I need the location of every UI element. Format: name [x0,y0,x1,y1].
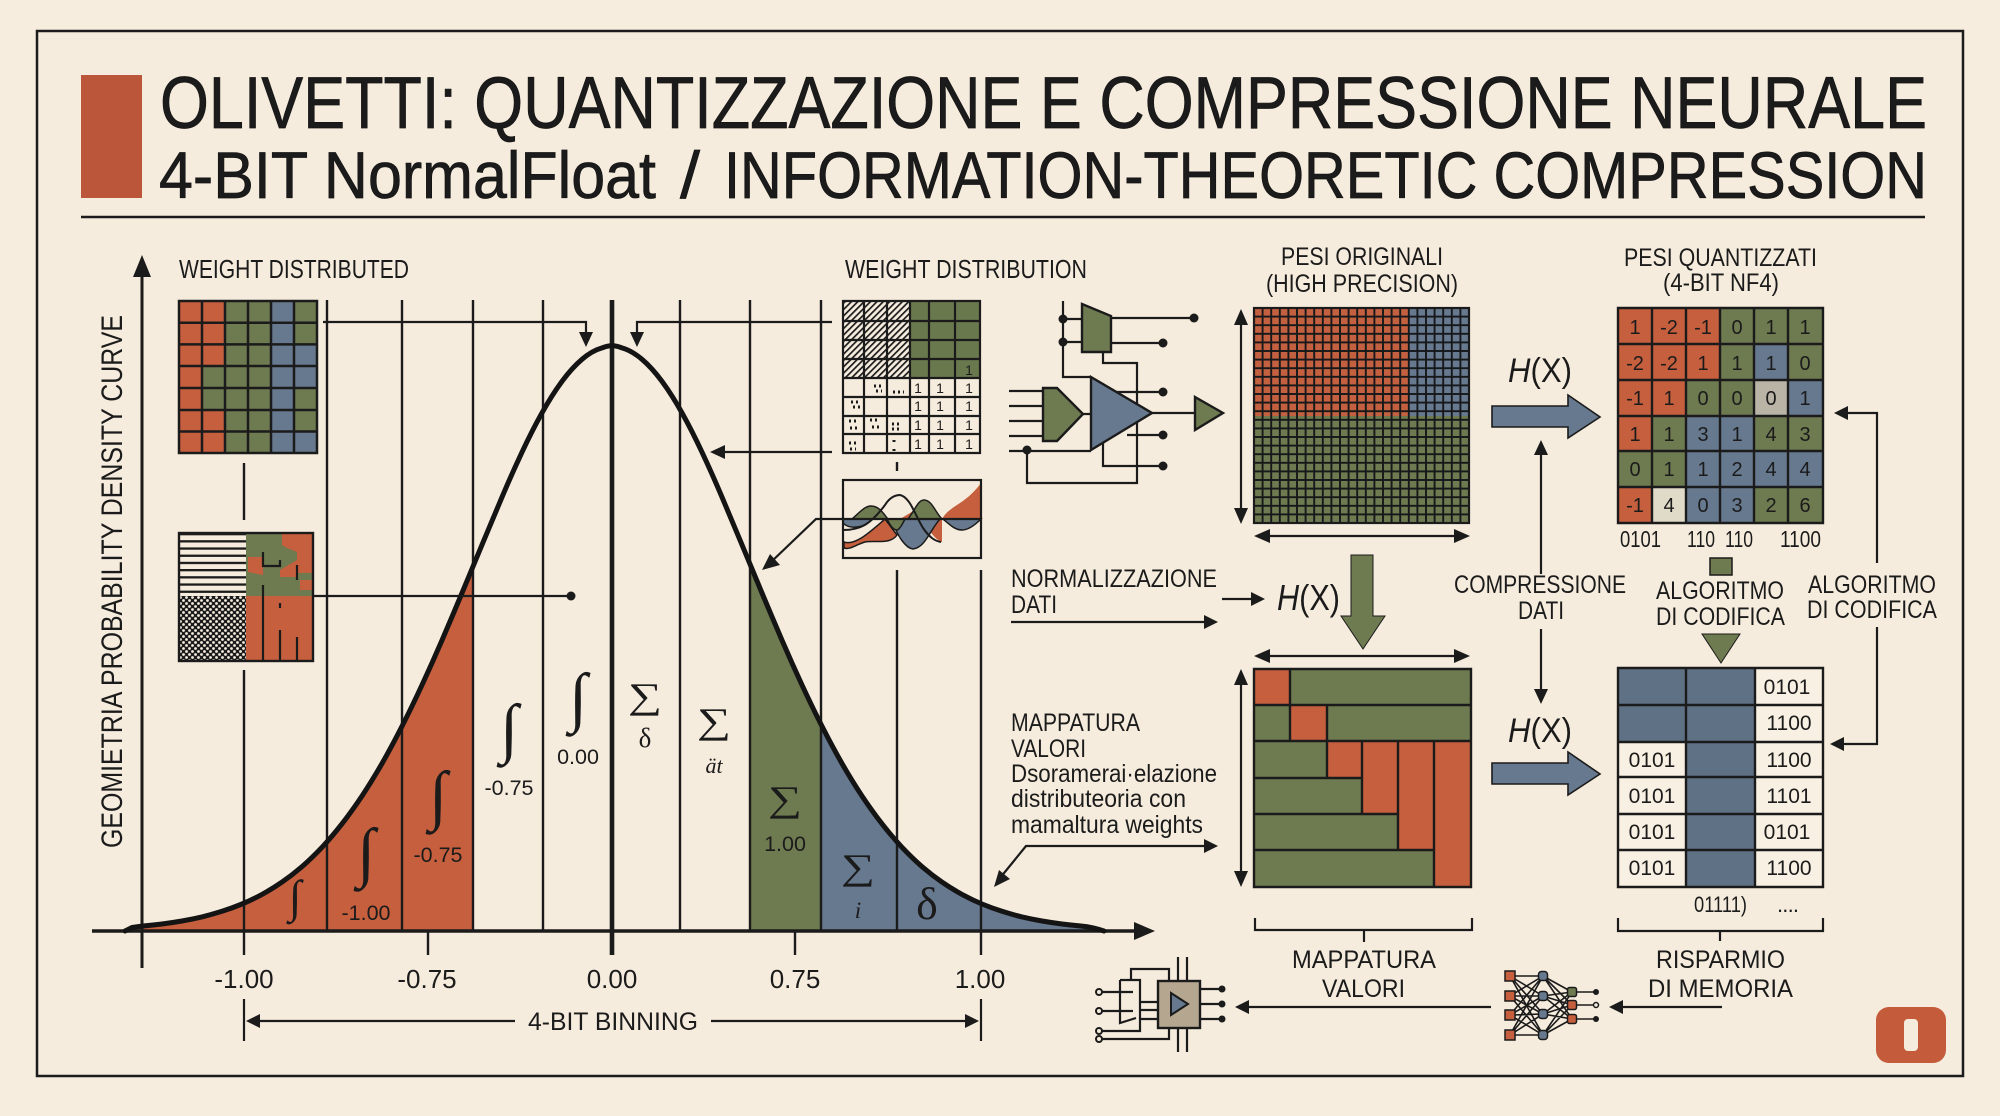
grid: quantized weights: 4 [1765,459,1777,481]
table: encoded bits [1618,668,1823,887]
icon: neural network [1505,971,1599,1040]
integral and sum annotations: 1.00 [764,832,806,856]
heading: pesi quantizzati: (4-BIT NF4) [1663,269,1779,297]
thumbnail: weight distribution table [843,301,980,453]
x axis tick labels: -1.00 [214,964,274,994]
arrow: mapped grid width [1254,649,1470,663]
text block: mappatura valori: VALORI [1011,735,1086,763]
arrow: grid width [1254,529,1470,543]
grid: quantized weights: 0 [1697,495,1709,517]
grid: quantized weights: 1 [1697,353,1709,375]
grid: quantized weights: 3 [1799,424,1811,446]
grid: quantized weights [1618,308,1823,523]
arrow: mapped grid height [1234,669,1248,887]
connector: algoritmo di codifica right: ALGORITMO [1808,571,1936,599]
encoded table footer: 01111) [1694,892,1747,917]
label: mappatura valori: MAPPATURA [1292,946,1436,974]
grid: quantized weights: -1 [1626,495,1644,517]
table: encoded bits: 0101 [1629,785,1675,808]
grid: quantized weights: -1 [1694,317,1712,339]
connector: algoritmo di codifica right [1807,406,1937,751]
integral and sum annotations: ∑ [697,701,731,741]
grid: quantized weights: 4 [1799,459,1811,481]
thumbnail: weight distribution table: 1 [914,436,922,452]
heading: pesi originali [1266,243,1458,298]
thumbnail: weight distribution table: 1 [965,398,973,414]
icon: circuit amplifier [1009,301,1223,483]
integral and sum annotations: ∫ [286,871,304,925]
arrow: weight distribution to curve peak [630,322,832,347]
heading: pesi quantizzati [1624,244,1817,297]
bracket: risparmio di memoria [1618,918,1823,941]
text block: mappatura valori: distributeoria con [1011,785,1186,813]
arrow: left to curve [710,445,832,459]
grid: quantized weights: 1 [1629,424,1641,446]
label: normalizzazione dati [1011,565,1265,629]
compressione dati with arrows [1454,440,1626,704]
bit labels under quantized grid: 110 [1687,526,1715,552]
text block: mappatura valori: Dsoramerai·elazione [1011,760,1217,788]
grid: quantized weights: 0 [1765,388,1777,410]
grid: quantized weights: 1 [1697,459,1709,481]
integral and sum annotations: ∫ [425,759,451,835]
thumbnail: weight distribution table: 1 [914,380,922,396]
integral and sum annotations: -0.75 [484,776,534,800]
arrow: wave distribution to curve [762,519,980,570]
label: risparmio di memoria [1648,946,1793,1003]
filled area: green bin [750,564,821,931]
title line 2 [159,138,1927,212]
grid: quantized weights: -2 [1626,353,1644,375]
label: risparmio di memoria: RISPARMIO [1656,946,1785,974]
integral and sum annotations: δ [916,878,938,929]
grid: mapped values [1254,669,1471,887]
heading: pesi originali: (HIGH PRECISION) [1266,270,1458,298]
label: risparmio di memoria: DI MEMORIA [1648,975,1793,1003]
thumbnail: weight distribution table: 1 [936,398,944,414]
table: encoded bits: 0101 [1764,821,1810,844]
bin grid lines [244,300,981,955]
arrow: network to chip [1235,1000,1491,1014]
4-bit binning range arrow [244,999,981,1041]
connector: algoritmo di codifica centered: DI CODIFICA [1656,603,1785,631]
grid: quantized weights: 0 [1629,459,1641,481]
x axis tick labels: 0.75 [770,964,820,994]
arrow: weight grid to curve peak [323,322,593,347]
encoded table footer [1694,892,1799,917]
thumbnail: wave distribution [843,480,981,558]
bit labels under quantized grid: 0101 [1620,526,1661,552]
arrow: pattern quadrants connector [313,592,576,600]
badge [1876,1007,1946,1063]
integral and sum annotations: ∫ [496,692,522,768]
grid: quantized weights: 1 [1663,424,1675,446]
text block: mappatura valori: MAPPATURA [1011,709,1140,737]
y axis label: GEOMIETRIA PROBABILITY DENSITY CURVE [96,315,129,848]
grid: quantized weights: 3 [1731,495,1743,517]
label: weight distributed: WEIGHT DISTRIBUTED [179,256,409,284]
x axis tick labels [214,964,1005,994]
compressione dati with arrows: DATI [1518,597,1564,625]
x axis tick labels: -0.75 [397,964,457,994]
label: weight distribution: WEIGHT DISTRIBUTION [845,256,1087,284]
connector: algoritmo di codifica centered: ALGORITMO [1656,577,1784,605]
text block: mappatura valori: mamaltura weights [1011,811,1203,839]
bit labels under quantized grid: 110 [1725,526,1753,552]
x axis [92,922,1155,940]
heading: pesi quantizzati: PESI QUANTIZZATI [1624,244,1817,272]
grid: quantized weights: 2 [1765,495,1777,517]
table: encoded bits: 0101 [1629,749,1675,772]
thumbnail: pattern quadrants [179,533,313,661]
grid: quantized weights: 0 [1697,388,1709,410]
thumbnail: weight distribution table: 1 [965,417,973,433]
thumbnail: weight distribution table: 1 [965,362,973,378]
4-bit binning range arrow: 4-BIT BINNING [528,1008,698,1036]
thumbnail: weight distribution table: 1 [914,417,922,433]
table: encoded bits: 1100 [1766,857,1812,880]
grid: quantized weights: 0 [1799,353,1811,375]
table: encoded bits: 0101 [1629,821,1675,844]
x axis tick labels: 1.00 [955,964,1005,994]
panel: probability density chart [92,255,1155,1041]
bracket: mappatura valori [1255,918,1472,942]
label: normalizzazione dati: NORMALIZZAZIONE [1011,565,1217,593]
grid: quantized weights: 2 [1731,459,1743,481]
grid: quantized weights: 4 [1663,495,1675,517]
thumbnail: weight distribution table: 1 [965,436,973,452]
grid: quantized weights: -2 [1660,317,1678,339]
y axis [133,255,151,968]
integral and sum annotations: i [855,898,861,923]
connector: algoritmo di codifica centered [1656,558,1785,663]
grid: quantized weights: 1 [1799,388,1811,410]
grid: original high precision weights [1254,308,1469,523]
integral and sum annotations: ∫ [353,816,379,892]
arrow: mappatura forked [994,839,1218,887]
title line 2: 4-BIT NormalFloat [159,138,656,212]
grid: quantized weights: -2 [1660,353,1678,375]
encoded table footer: .... [1777,892,1799,917]
grid: quantized weights: 1 [1663,388,1675,410]
bit labels under quantized grid: 1100 [1780,526,1821,552]
title accent bar [81,75,142,198]
arrow: risparmio to network [1609,1000,1722,1014]
thumbnail: weight distribution table: 1 [936,436,944,452]
label: mappatura valori [1292,946,1436,1003]
thumbnail: weight distribution table: 1 [936,417,944,433]
arrow: green down [1341,555,1385,649]
integral and sum annotations: δ [639,723,651,753]
connector: algoritmo di codifica right: DI CODIFICA [1807,596,1937,624]
text block: mappatura valori [1011,709,1217,839]
grid: quantized weights: 1 [1765,317,1777,339]
center line [610,300,614,955]
formula: H(X) middle: H(X) [1277,577,1340,618]
filled area: blue bins [821,724,1104,931]
formula and arrow: lower H(X): H(X) [1508,712,1572,750]
title block [81,63,1927,217]
thumbnail: weight distribution table: 1 [936,380,944,396]
arrow: grid height [1234,309,1248,524]
integral and sum annotations: 0.00 [557,745,599,769]
thumbnail: weight distribution table: 1 [914,398,922,414]
small connector tick [896,462,898,471]
integral and sum annotations: -0.75 [413,843,463,867]
thumbnail: colored weight grid [179,301,317,453]
bell curve [125,346,1104,931]
x axis tick labels: 0.00 [587,964,637,994]
grid: quantized weights: 1 [1731,353,1743,375]
grid: quantized weights: -1 [1626,388,1644,410]
integral and sum annotations: ∑ [768,779,802,819]
label: mappatura valori: VALORI [1322,975,1405,1003]
grid: quantized weights: 1 [1799,317,1811,339]
formula and arrow: top H(X) [1492,352,1600,438]
title line 2: / [680,138,701,212]
table: encoded bits: 1101 [1766,785,1812,808]
grid: quantized weights: 0 [1731,317,1743,339]
grid: quantized weights: 1 [1731,424,1743,446]
integral and sum annotations: ät [705,753,723,778]
heading: pesi originali: PESI ORIGINALI [1281,243,1443,271]
thumbnail: weight distribution table: 1 [965,380,973,396]
table: encoded bits: 1100 [1766,712,1812,735]
grid: quantized weights: 1 [1663,459,1675,481]
integral and sum annotations: -1.00 [341,901,391,925]
table: encoded bits: 1100 [1766,749,1812,772]
grid: quantized weights: 0 [1731,388,1743,410]
grid: quantized weights: 3 [1697,424,1709,446]
grid: quantized weights: 1 [1765,353,1777,375]
compressione dati with arrows: COMPRESSIONE [1454,571,1626,599]
integral and sum annotations: ∑ [841,847,875,887]
integral and sum annotations: ∑ [628,676,662,716]
table: encoded bits: 0101 [1629,857,1675,880]
icon: chip circuit [1096,957,1226,1052]
formula and arrow: lower H(X) [1492,712,1600,795]
bit labels under quantized grid [1620,526,1821,552]
label: normalizzazione dati: DATI [1011,591,1057,619]
grid: quantized weights: 4 [1765,424,1777,446]
integral and sum annotations: ∫ [565,661,591,737]
formula and arrow: top H(X): H(X) [1508,352,1572,390]
integral and sum annotations [286,661,938,929]
table: encoded bits: 0101 [1764,676,1810,699]
grid: quantized weights: 1 [1629,317,1641,339]
grid: quantized weights: 6 [1799,495,1811,517]
filled area: red bins [125,566,473,931]
